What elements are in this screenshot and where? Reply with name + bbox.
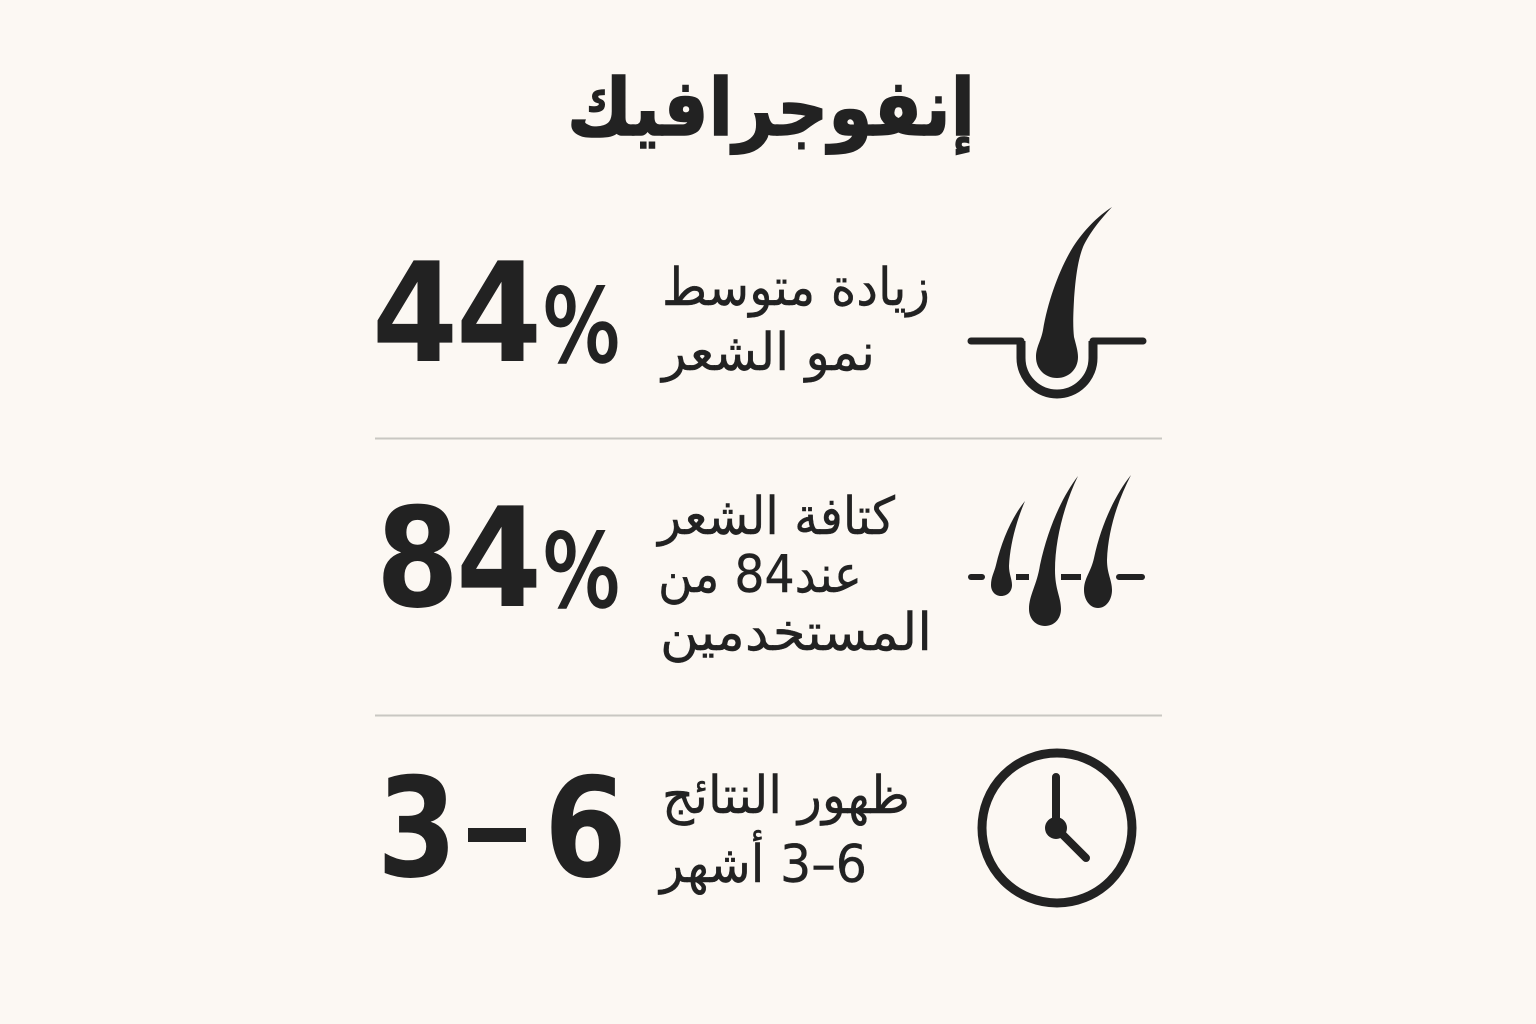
statistic: 84%: 4 (456, 478, 542, 639)
row: average hair growth (372, 207, 1143, 394)
statistic: 84%: % (542, 512, 621, 630)
statistic: 44%: 4 (456, 233, 542, 394)
statistic: 44%: % (542, 267, 621, 385)
description: average hair growth increase: نمو الشعر (659, 323, 875, 383)
statistic: 84% (376, 478, 621, 639)
description: results appear in 3–6 months (657, 766, 910, 895)
row: time to results (377, 748, 1132, 909)
divider (375, 438, 1162, 440)
description: hair density among users: كتافة الشعر (655, 487, 895, 547)
description: hair density among users: المستخدمين (660, 603, 932, 663)
row: hair density (376, 475, 1145, 663)
divider (375, 714, 1162, 716)
statistic: 3–6 (377, 748, 627, 909)
description: average hair growth increase (659, 258, 930, 383)
statistic: 44%: 4 (372, 233, 458, 394)
title: إنفوجرافيك (567, 62, 975, 155)
description: results appear in 3–6 months: ظهور النتائج (662, 766, 910, 826)
description: hair density among users: عند84 من (658, 545, 862, 605)
icon: clock (982, 753, 1132, 903)
description: average hair growth increase: زيادة متوسط (662, 258, 930, 318)
statistic: 3–6: 6 (544, 748, 627, 909)
statistic: 3–6: 3 (377, 748, 457, 909)
statistic: 44% (372, 233, 621, 394)
icon: hair follicle (971, 207, 1143, 394)
description: results appear in 3–6 months: ⁦3–6⁩ أشهر (657, 830, 867, 895)
description: hair density among users (655, 487, 932, 663)
icon: three hairs through skin (968, 475, 1145, 626)
statistic: 84%: 8 (376, 478, 459, 639)
